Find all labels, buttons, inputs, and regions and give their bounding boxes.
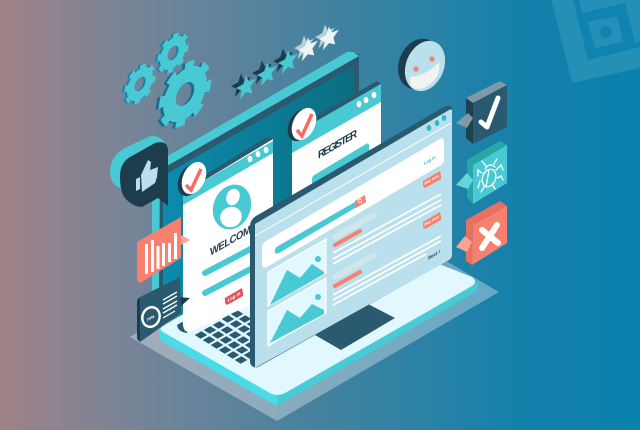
- decorative corner logo: [552, 0, 640, 83]
- image card one: [268, 239, 326, 306]
- register window: [292, 81, 381, 260]
- input fields: [205, 243, 262, 273]
- percent bubble: [137, 277, 190, 342]
- register input: [312, 143, 369, 220]
- thumb icon: [136, 160, 158, 192]
- check bubble: [456, 81, 507, 144]
- next link: Next !: [428, 249, 440, 262]
- x mark: [482, 225, 498, 248]
- percent label: 70%: [146, 314, 154, 323]
- log in button: [225, 288, 243, 305]
- bug icon: [478, 159, 503, 192]
- buy now button two: Buy now: [424, 213, 440, 227]
- welcome check badge: [173, 158, 211, 200]
- thumbs up bubble: [110, 136, 168, 207]
- bars: [145, 233, 177, 274]
- lines: [163, 292, 177, 318]
- image card two: [268, 278, 326, 346]
- ground shadow: [130, 205, 499, 421]
- log in button: Log in: [228, 291, 240, 304]
- gear: small top: [157, 28, 187, 78]
- search bar: [275, 195, 366, 254]
- smiley face: [391, 32, 452, 97]
- buy now button one: [423, 171, 441, 188]
- laptop base: [159, 225, 478, 406]
- laptop screen: [250, 106, 452, 368]
- welcome label: WELCOME: [210, 220, 257, 259]
- search panel: [262, 138, 444, 268]
- x bubble: [456, 201, 507, 265]
- keyboard: [177, 310, 259, 364]
- product text two: [333, 236, 441, 305]
- window dots: [248, 147, 268, 162]
- gear: small left: [124, 59, 154, 109]
- register label: REGISTER: [318, 127, 357, 162]
- back monitor panel: [152, 52, 359, 325]
- avatar: [206, 179, 258, 235]
- trackpad: [315, 304, 395, 350]
- product text one: [333, 194, 441, 264]
- bug bubble: [456, 141, 507, 204]
- bar chart bubble: [137, 217, 190, 283]
- rating stars: [231, 20, 339, 101]
- screen dots: [427, 115, 446, 131]
- welcome window: [183, 137, 273, 332]
- gear: large: [158, 53, 208, 136]
- buy now button one: Buy now: [424, 172, 440, 186]
- buy now button two: [423, 212, 441, 229]
- gears: [124, 28, 208, 136]
- window dots: [357, 92, 376, 107]
- log in link: Log in: [424, 154, 436, 166]
- check mark: [481, 98, 498, 127]
- register check badge: [283, 104, 321, 145]
